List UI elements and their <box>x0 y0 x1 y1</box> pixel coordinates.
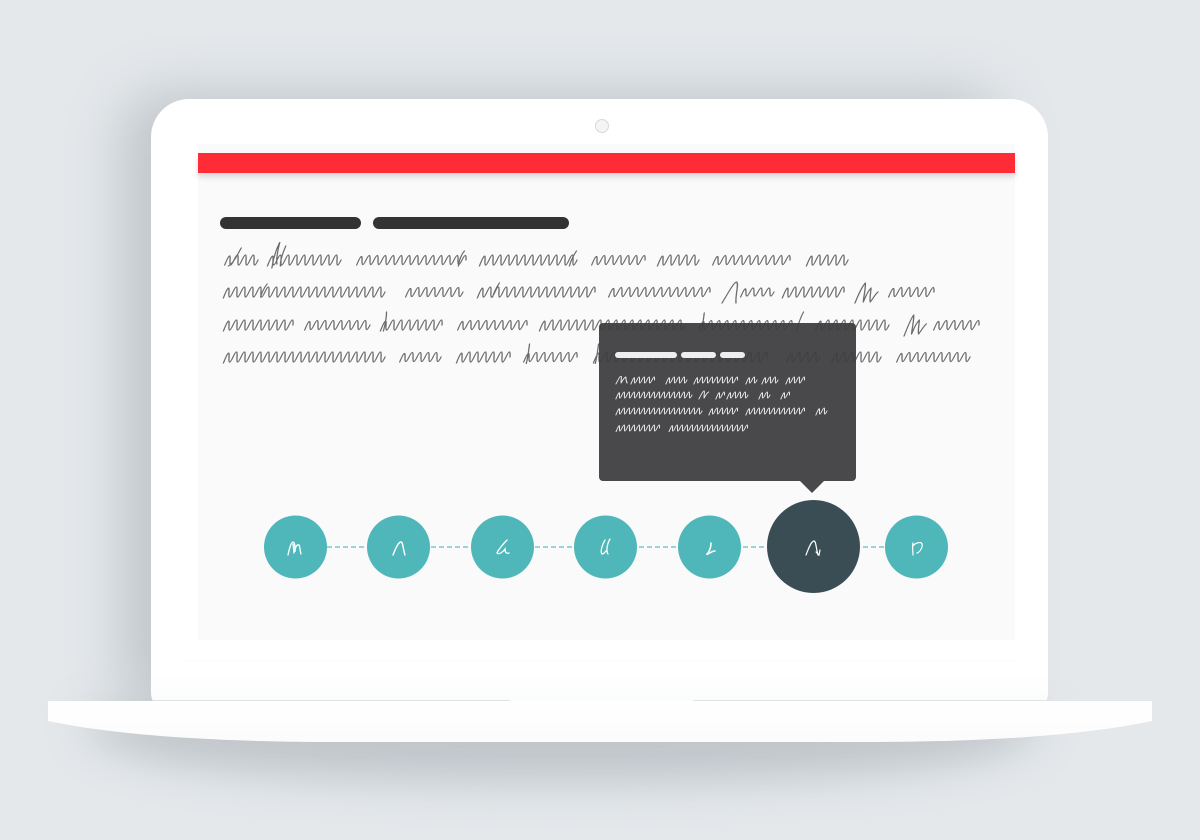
step circle 4 <box>574 516 637 578</box>
step circle 5 <box>678 516 741 578</box>
step circle 2 <box>367 516 430 578</box>
scribble line 2 <box>222 282 937 303</box>
laptop shadow <box>84 92 1042 782</box>
laptop lid <box>151 99 1048 701</box>
laptop screen <box>185 144 1015 662</box>
step circle 1 <box>264 516 327 578</box>
scribble line 1 <box>224 242 853 268</box>
step circle 6 (active) <box>767 500 860 593</box>
timeline connector <box>327 546 885 548</box>
red header bar <box>198 153 1015 177</box>
heading bars <box>220 217 569 229</box>
step circle 7 <box>885 516 948 578</box>
scribbled body text <box>222 242 982 364</box>
tooltip heading bars <box>615 352 745 358</box>
step circle 3 <box>471 516 534 578</box>
laptop base <box>48 700 1152 742</box>
camera <box>596 120 608 132</box>
tooltip scribbled text <box>616 376 828 432</box>
scribble line 4 <box>223 344 974 364</box>
scribble line 3 <box>222 312 982 336</box>
tooltip callout <box>599 323 856 493</box>
